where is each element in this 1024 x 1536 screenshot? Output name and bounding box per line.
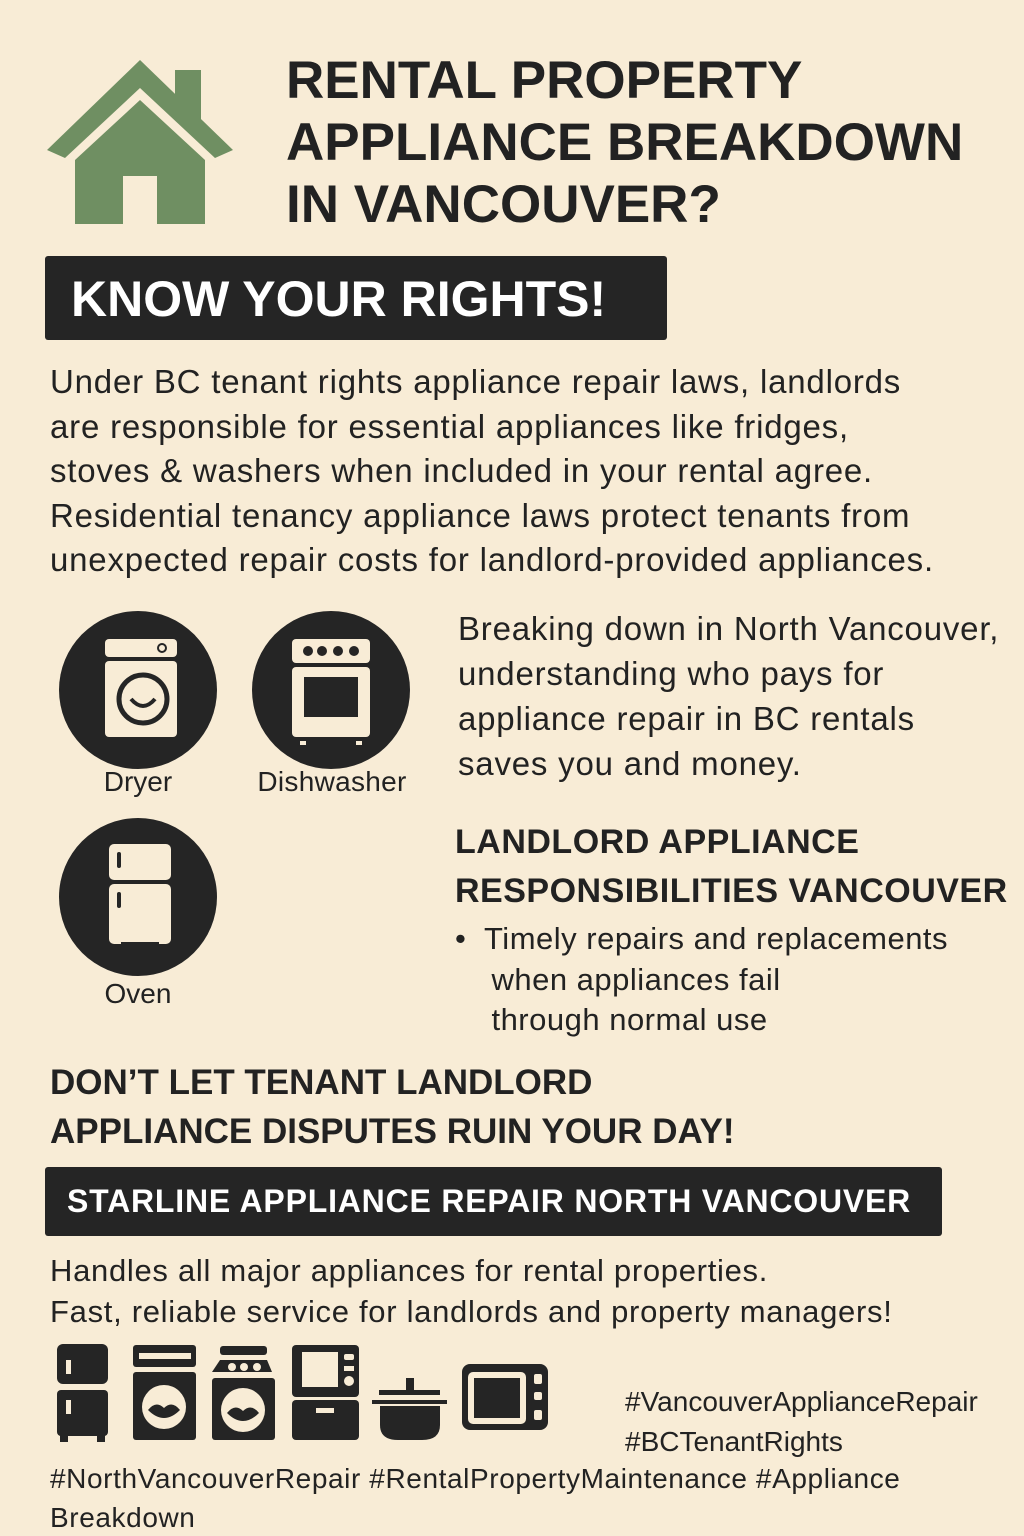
heading: landlord responsibilities	[455, 823, 1008, 910]
icon: dryer	[59, 611, 217, 797]
icons row	[57, 1344, 548, 1442]
bullet: when appliances fail	[491, 962, 781, 996]
hashtags bottom: #NorthVancouverRepair #RentalPropertyMaintenance #Appliance	[50, 1463, 900, 1494]
text: north vancouver: Breaking down in North Vancouver,	[458, 610, 999, 647]
hashtags right	[625, 1386, 978, 1457]
label: oven: Oven	[105, 978, 171, 1009]
banner: starline	[45, 1167, 942, 1236]
service text: Handles all major appliances for rental properties.	[50, 1253, 768, 1288]
intro paragraph: Residential tenancy appliance laws protect tenants from	[50, 496, 910, 534]
title: IN VANCOUVER?	[286, 175, 721, 234]
hashtags right: #VancouverApplianceRepair	[625, 1386, 978, 1417]
label: dryer: Dryer	[104, 766, 172, 797]
text: north vancouver: appliance repair in BC rentals	[458, 700, 915, 737]
icon: oven	[59, 818, 217, 1009]
text: north vancouver	[458, 610, 999, 782]
service text	[50, 1253, 893, 1329]
title: APPLIANCE BREAKDOWN	[286, 113, 963, 172]
label: dishwasher: Dishwasher	[257, 766, 407, 797]
banner: know your rights	[45, 256, 667, 340]
heading: don't let disputes: APPLIANCE DISPUTES RUIN YOUR DAY!	[50, 1112, 735, 1151]
service text: Fast, reliable service for landlords and property managers!	[50, 1294, 893, 1329]
text: north vancouver: saves you and money.	[458, 745, 802, 782]
bullet	[455, 921, 948, 1037]
hashtags right: #BCTenantRights	[625, 1426, 843, 1457]
icon: house	[47, 60, 233, 224]
heading: don't let disputes	[50, 1063, 735, 1151]
heading: don't let disputes: DON’T LET TENANT LANDLORD	[50, 1063, 592, 1102]
bullet: • Timely repairs and replacements	[455, 921, 948, 956]
banner: starline: STARLINE APPLIANCE REPAIR NORTH VANCOUVER	[67, 1183, 911, 1219]
intro paragraph: unexpected repair costs for landlord-provided appliances.	[50, 541, 934, 578]
intro paragraph: stoves & washers when included in your rental agree.	[50, 452, 873, 489]
title	[286, 51, 963, 234]
bullet: through normal use	[491, 1002, 768, 1037]
intro paragraph	[50, 363, 934, 578]
icon: dishwasher	[252, 611, 410, 797]
intro paragraph: are responsible for essential appliances like fridges,	[50, 408, 849, 444]
hashtags bottom	[50, 1463, 900, 1533]
heading: landlord responsibilities: RESPONSIBILITIES VANCOUVER	[455, 872, 1008, 910]
heading: landlord responsibilities: LANDLORD APPLIANCE	[455, 823, 859, 861]
text: north vancouver: understanding who pays for	[458, 655, 884, 692]
intro paragraph: Under BC tenant rights appliance repair laws, landlords	[50, 363, 901, 400]
banner: know your rights: KNOW YOUR RIGHTS!	[71, 271, 606, 327]
hashtags bottom: Breakdown	[50, 1502, 195, 1533]
title: RENTAL PROPERTY	[286, 51, 802, 110]
